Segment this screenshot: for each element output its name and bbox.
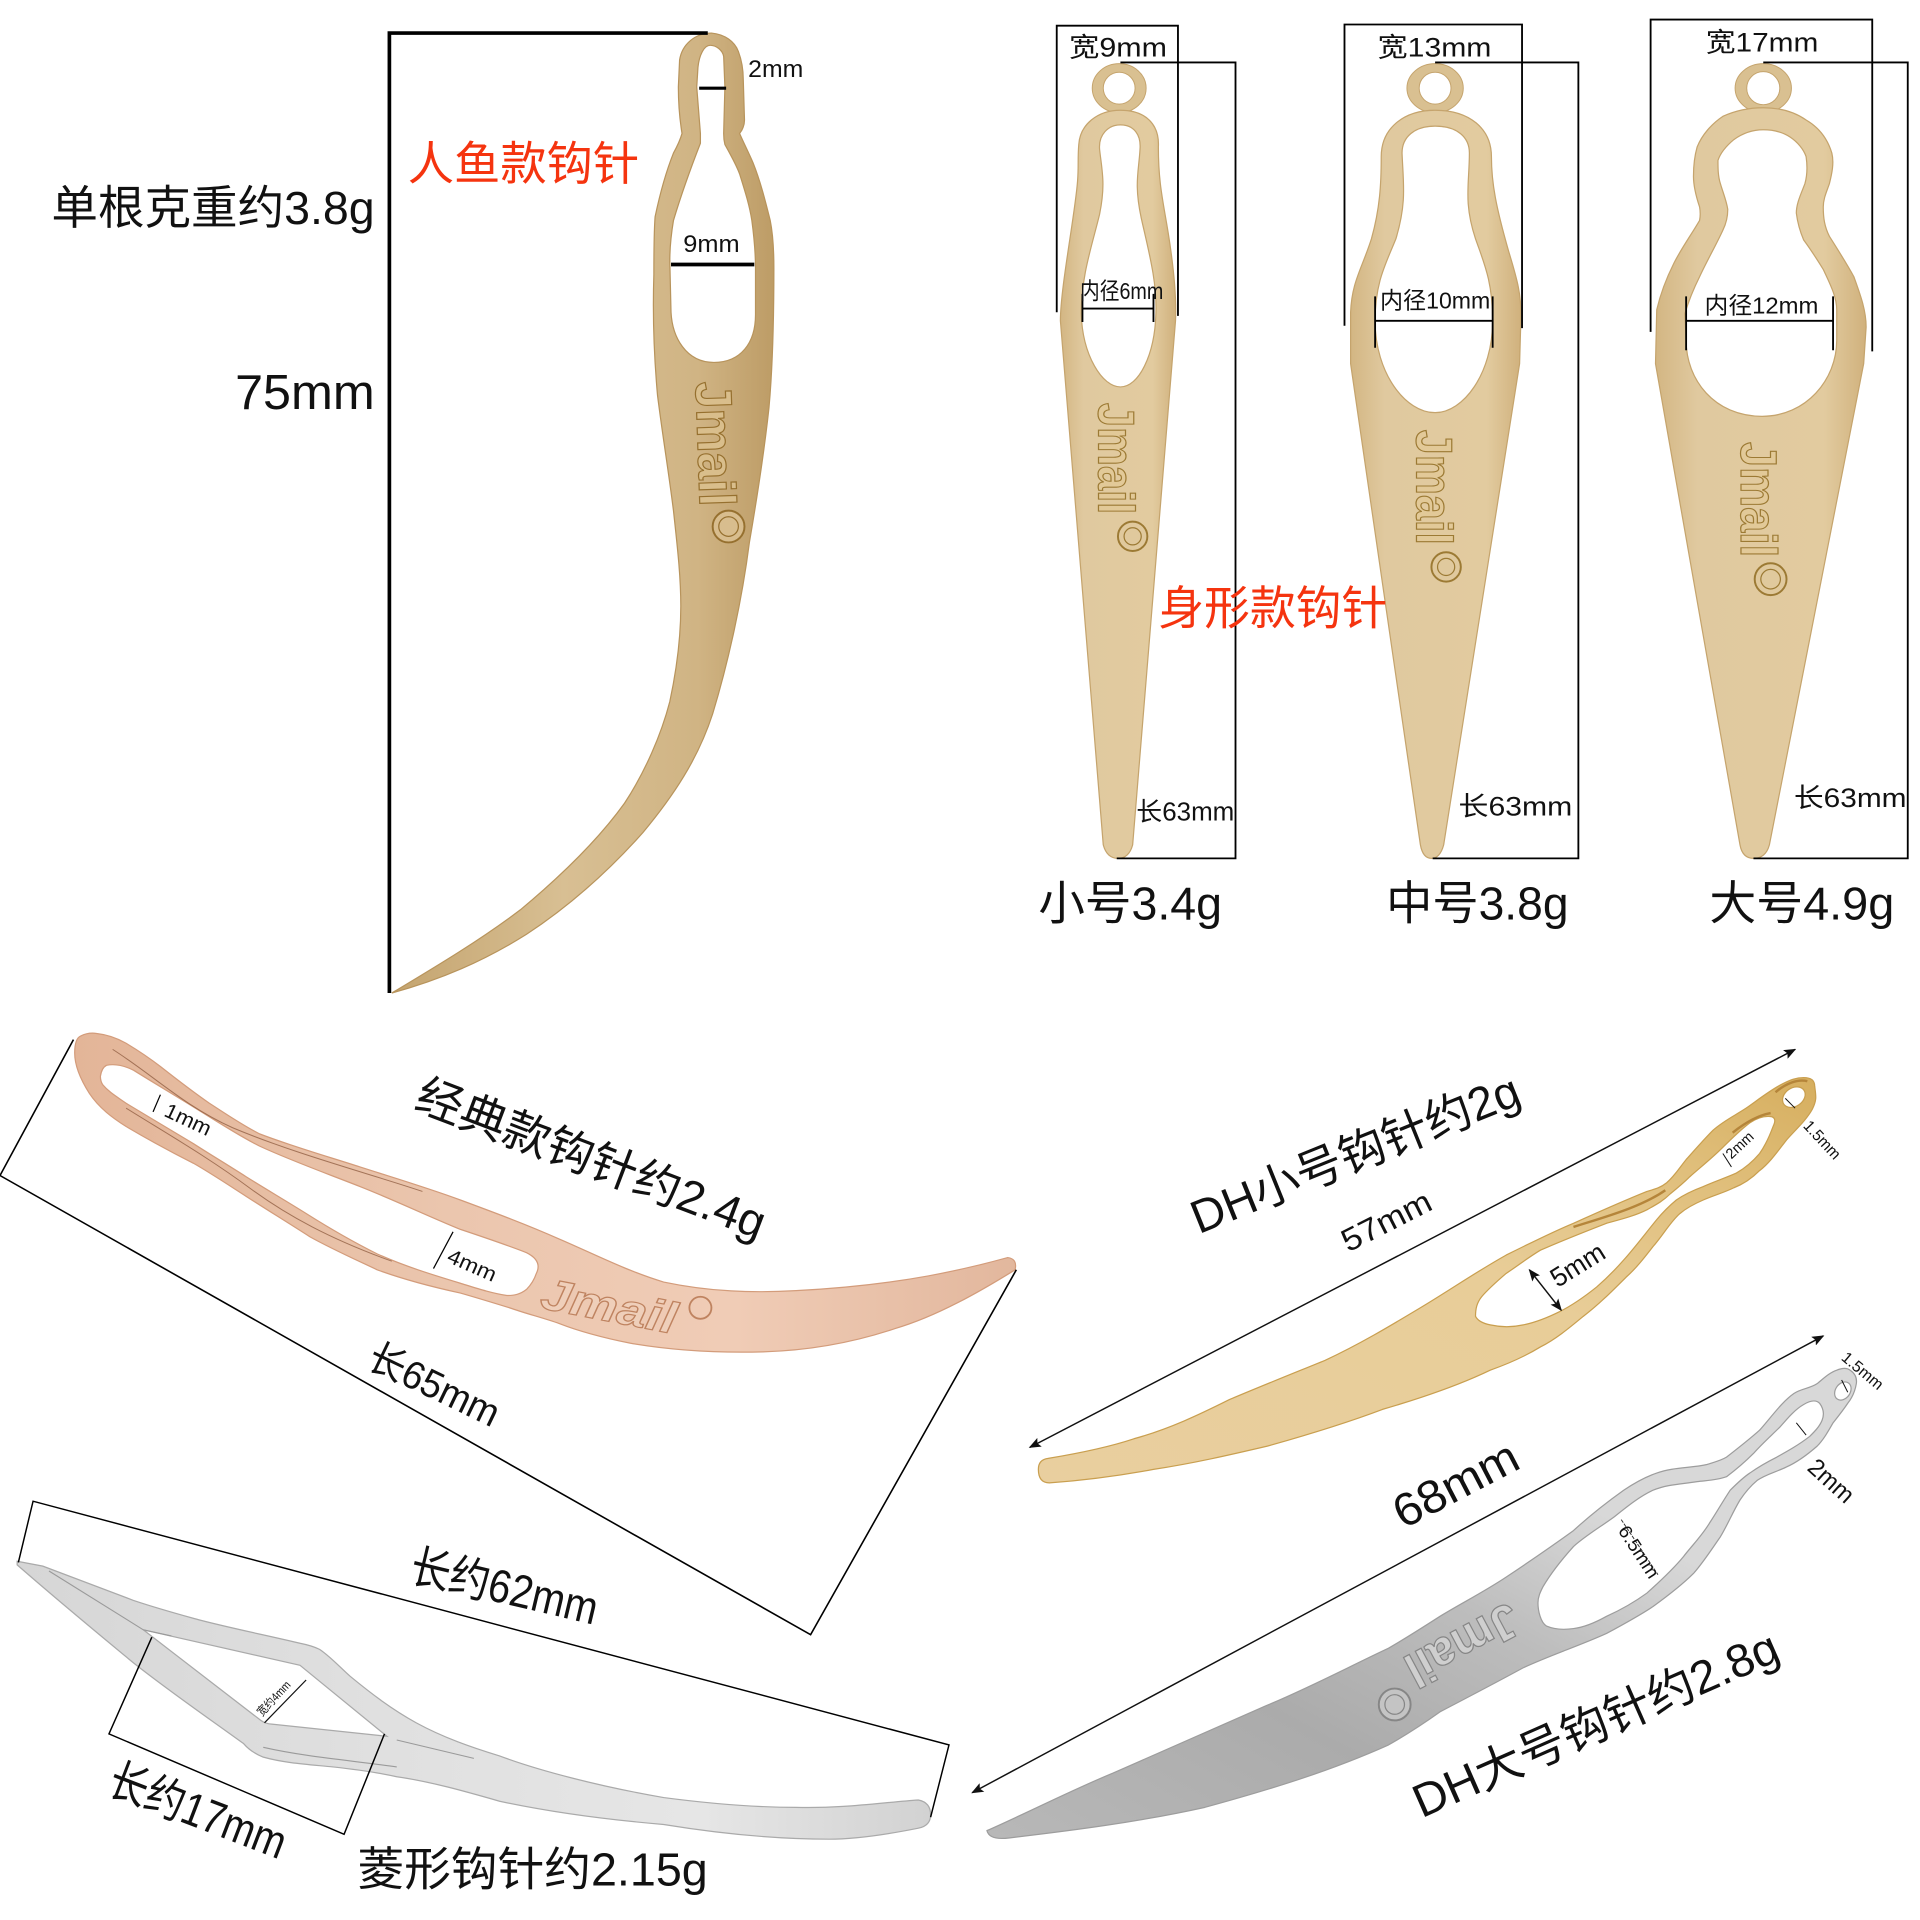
2mm measure line <box>699 87 726 89</box>
panel: mermaid crochet hook <box>51 33 803 993</box>
medium hook frames <box>1344 24 1578 858</box>
rhombus opening frame <box>109 1637 384 1834</box>
label length 63mm: 长63mm <box>1458 792 1572 822</box>
1mm tick <box>153 1095 160 1112</box>
2mm tick <box>1723 1153 1731 1167</box>
title: rhombus hook weight: 菱形钩针约2.15g <box>358 1844 708 1896</box>
label 2mm: 2mm <box>1723 1129 1757 1163</box>
small hook ring <box>1092 64 1146 113</box>
title: DH small weight: DH小号钩针约2g <box>1183 1064 1527 1244</box>
medium hook inner measure <box>1375 296 1493 348</box>
label length 63mm: 长63mm <box>1794 783 1907 813</box>
classic hook body <box>75 1033 1016 1352</box>
classic hook bevel highlights <box>113 1049 422 1261</box>
title: mermaid hook: 人鱼款钩针 <box>408 138 639 190</box>
panel: large body hook <box>1651 20 1908 930</box>
arrow: 5mm width <box>1529 1270 1561 1310</box>
panel: medium body hook <box>1344 24 1578 930</box>
label length 62mm: 长约62mm <box>405 1540 603 1634</box>
label 9mm: 9mm <box>683 231 740 258</box>
medium hook logo: Jmail <box>1406 430 1464 545</box>
classic hook frame <box>0 1040 1016 1635</box>
rhombus hook crease details <box>49 1571 474 1767</box>
mermaid hook length frame <box>389 33 708 993</box>
label inner 12mm: 内径12mm <box>1704 292 1818 318</box>
DH small hook bevel highlight <box>1573 1081 1807 1227</box>
small hook frames <box>1057 26 1236 858</box>
label length 63mm: 长63mm <box>1136 797 1234 826</box>
label inner 10mm: 内径10mm <box>1380 288 1490 314</box>
title: classic hook weight: 经典款钩针约2.4g <box>409 1069 773 1249</box>
large hook frames <box>1651 20 1908 858</box>
2mm tick <box>1796 1423 1806 1435</box>
label 5mm: 5mm <box>1545 1237 1611 1293</box>
label inner 6mm: 内径6mm <box>1080 278 1163 304</box>
label small weight: 小号3.4g <box>1038 878 1222 930</box>
9mm measure line <box>671 263 754 266</box>
arrow: 68mm length <box>972 1336 1823 1793</box>
label 4mm: 4mm <box>444 1245 500 1287</box>
label 6.5mm: 6.5mm <box>1614 1521 1664 1582</box>
label length 65mm: 长65mm <box>361 1336 507 1436</box>
DH small hook body <box>1038 1078 1816 1483</box>
1.5mm tick <box>1842 1380 1848 1392</box>
large hook logo: Jmail <box>1730 442 1788 557</box>
label width 13mm: 宽13mm <box>1378 32 1491 62</box>
small hook inner measure <box>1082 294 1153 322</box>
label large weight: 大号4.9g <box>1709 878 1894 930</box>
panel: DH large silver hook <box>972 1336 1886 1838</box>
6.5mm dashed measure <box>1621 1520 1658 1575</box>
label medium weight: 中号3.8g <box>1386 878 1569 930</box>
label 1mm: 1mm <box>161 1099 215 1141</box>
panel: small body hook <box>1038 26 1236 930</box>
DH large hook logo: Jmail <box>1395 1592 1529 1697</box>
title: DH large weight: DH大号钩针约2.8g <box>1405 1621 1786 1828</box>
panel: rhombus silver hook <box>17 1501 949 1896</box>
classic hook logo: Jmail <box>537 1269 682 1344</box>
title: body hook: 身形款钩针 <box>1158 582 1387 634</box>
mermaid hook logo: Jmail <box>685 380 747 507</box>
classic hook logo <box>537 1269 711 1344</box>
mermaid hook body <box>392 33 774 993</box>
large hook body <box>1656 108 1866 858</box>
label width 17mm: 宽17mm <box>1706 27 1818 57</box>
DH large hook body <box>987 1368 1857 1838</box>
weight label: 单根克重约3.8g <box>51 182 375 234</box>
large hook inner measure <box>1686 296 1833 350</box>
label 2mm: 2mm <box>1802 1454 1859 1509</box>
medium hook ring <box>1407 64 1463 113</box>
label 1.5mm: 1.5mm <box>1838 1349 1886 1394</box>
1.5mm tick <box>1785 1098 1795 1108</box>
medium hook body <box>1351 110 1521 858</box>
rhombus hook body <box>17 1561 931 1839</box>
small hook body <box>1060 110 1176 858</box>
label length 17mm: 长约17mm <box>102 1753 294 1869</box>
label width 9mm: 宽9mm <box>1069 32 1167 62</box>
length label: 75mm <box>235 366 375 420</box>
arrow: 57mm length <box>1030 1049 1795 1447</box>
small hook logo: Jmail <box>1087 403 1145 514</box>
panel: DH small gold hook <box>1030 1049 1844 1483</box>
DH small hook eye <box>1779 1083 1809 1112</box>
rhombus hook overall frame <box>18 1501 949 1817</box>
label 2mm: 2mm <box>748 56 803 83</box>
label 1.5mm: 1.5mm <box>1800 1118 1844 1163</box>
label 68mm: 68mm <box>1384 1430 1527 1538</box>
width measure line <box>264 1680 306 1723</box>
panel: classic rose hook <box>0 1033 1016 1635</box>
large hook ring <box>1735 64 1791 113</box>
label width 4mm: 宽约4mm <box>254 1678 293 1719</box>
label 57mm: 57mm <box>1335 1183 1438 1259</box>
4mm tick <box>433 1232 453 1269</box>
DH large hook eye <box>1831 1379 1854 1403</box>
